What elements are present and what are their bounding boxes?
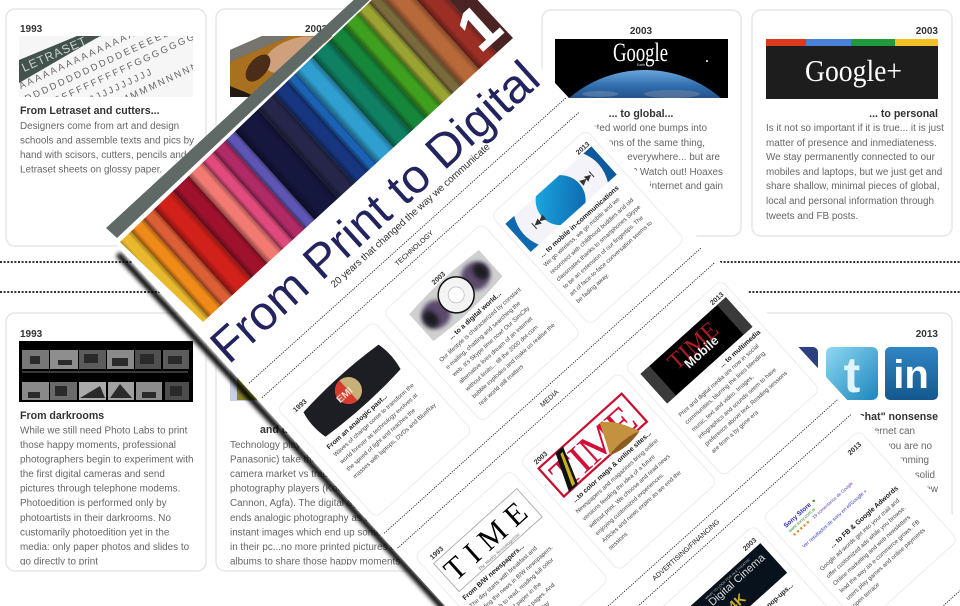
image: search result ad	[783, 468, 869, 550]
card title: ... to global...	[609, 108, 673, 120]
title: ... to a digital world...	[448, 291, 503, 341]
body text: Letraset sheets on glossy paper.	[20, 164, 162, 176]
body: are from a by gone era	[711, 409, 760, 455]
image: letraset sheet: AAAAAAAAAAAAAAAAAAAAAA	[17, 3, 192, 92]
body	[332, 381, 438, 481]
body: Online marketing and web newsletters	[832, 515, 912, 587]
body text: local and personal information through	[766, 196, 934, 207]
year label 2003 center: 2003	[630, 26, 653, 37]
card: pop-ups	[655, 525, 853, 606]
body text: Designers come from art and design	[20, 121, 179, 132]
year 2003: 2003	[533, 451, 549, 466]
body text: those happy moments, professional	[20, 440, 176, 451]
body text: photoartists in their darkrooms. No	[20, 513, 171, 524]
body	[678, 341, 796, 455]
title: From B/W newspapers...	[462, 543, 526, 602]
image: woman photo	[230, 29, 400, 97]
body: Print and digital media are now in social	[678, 343, 761, 419]
image: digital cinema ad	[678, 543, 787, 606]
body text: go directly to print	[20, 556, 98, 568]
body text: photography players (Kodak,	[230, 484, 356, 494]
panel: 2013 social media card	[752, 313, 952, 571]
body: users play games and online payments	[845, 528, 927, 602]
body text: media: only paper photos and slides to	[20, 542, 190, 553]
body: world forever as technology evolves at	[339, 393, 419, 466]
body: communities, blurring the lines blending	[684, 351, 767, 426]
body text: they true? Watch out! Hoaxes	[593, 167, 723, 178]
image: search result ad: Ver resultados de sony en el/Google »	[801, 488, 869, 550]
body	[438, 286, 564, 408]
body: infographics and sounds seem to have	[698, 367, 778, 440]
pencil banner	[120, 0, 513, 322]
section divider: dotted lines	[0, 262, 960, 292]
panel: 2003 Google Earth card	[541, 9, 742, 237]
body text: ends analogic photography as we know	[230, 513, 404, 524]
card: mobile in-communications	[491, 130, 685, 325]
body text: instant images which end up somewhere	[230, 528, 409, 538]
image: TIME Mobile: Mobile	[681, 333, 722, 371]
title: ...to color mags & online sites...	[572, 430, 653, 504]
body: offer customized ads while you browse.	[826, 505, 908, 580]
body text: We stay permanently connected to our	[766, 152, 936, 163]
body: to be an extension of our fingertips. The	[562, 215, 645, 290]
year label 1993: 1993	[20, 329, 43, 340]
title: From an analogic past...	[326, 393, 389, 451]
body text: camera market vs traditional	[230, 469, 354, 480]
body text: While we still need Photo Labs to print	[20, 426, 188, 436]
title: From Print to Digital	[201, 51, 550, 373]
body: web. It's Skype time now! Our SimCity	[451, 306, 531, 379]
section: advertising	[521, 399, 851, 606]
icon: twitter: t	[844, 347, 861, 403]
card title: and digital photography	[260, 424, 381, 436]
body: bubble explodes and make us realise the	[471, 322, 557, 400]
section: media	[384, 248, 715, 548]
body text: hand with scisors, cutters, pencils and	[20, 150, 186, 161]
image: TIME Mobile	[640, 297, 753, 404]
body: enjoying customized experiences.	[595, 472, 666, 537]
body: sessions	[608, 532, 629, 552]
body text: mobiles and laptops, but we just get and	[766, 167, 942, 178]
year 2003: 2003	[431, 271, 447, 287]
body text: solid	[915, 470, 935, 481]
year 2013: 2013	[575, 141, 591, 157]
image: TIME bw logo: TIME	[437, 489, 540, 587]
body text	[766, 123, 944, 222]
body text: Photoedition is performed only by	[20, 498, 167, 509]
body text: spread in internet and gain	[606, 181, 723, 192]
image: blue media player	[505, 146, 617, 252]
body: alternative lives dream of an internet	[458, 316, 534, 385]
card: digital world	[383, 223, 581, 422]
year 2013: 2013	[709, 291, 726, 307]
card title: From darkrooms	[20, 410, 104, 422]
image: contact sheet	[19, 341, 193, 402]
body text: many versions of the same thing,	[560, 138, 705, 149]
body text: Cannon, Agfa). The digital age	[230, 498, 364, 509]
year label 1993: 1993	[20, 24, 43, 35]
body text	[20, 121, 194, 176]
image: Google Earth: Earth	[637, 63, 645, 67]
image: search result ad: 19 comentarios de Google	[811, 480, 854, 520]
icon: twitter	[826, 347, 878, 403]
body: e-mailing, chatting and searching the	[445, 300, 523, 371]
body: music, text and video. Images,	[691, 374, 756, 433]
body: art of face-to-face conversation seems to	[569, 220, 654, 298]
image: letraset sheet: KKKKLLLLLLLMMMMNNNNNNN	[41, 52, 218, 143]
image: vinyl record: EMI	[335, 385, 355, 406]
grey top band	[106, 0, 374, 238]
section label: technology: TECHNOLOGY	[394, 230, 435, 268]
card: multimedia	[624, 280, 820, 477]
body: Newspapers and magazines bring online	[575, 438, 660, 515]
image: CD	[409, 250, 502, 341]
card: black and white newspapers	[414, 470, 609, 606]
icon: linkedin: in	[893, 353, 929, 397]
body: lead the way as e-commerce grows. FB	[839, 519, 921, 594]
image: digital camera fragment	[230, 341, 400, 401]
body	[819, 498, 934, 606]
body	[468, 537, 581, 606]
image: Google+ banner: Google+	[805, 53, 902, 88]
body text: in their pc...no more printed pictures or	[230, 542, 400, 553]
body: versions feeding the idea of a future	[582, 454, 657, 522]
body: real world still matters	[478, 364, 525, 407]
body: classmates thanks to smartphones Skype	[556, 204, 643, 283]
body text: the first digital cameras and send	[20, 469, 165, 480]
body: masses with laptops, DVDs and BlueRay	[352, 403, 438, 480]
body: preference above text. Reading sessions	[704, 371, 789, 448]
body: the speed of light and reaches the	[346, 407, 418, 473]
body text: you are no	[885, 441, 933, 452]
body: Waves of change come to transform the	[333, 382, 416, 458]
card: analogic past	[277, 321, 472, 518]
panel: 1993 letraset card	[6, 0, 222, 246]
body	[574, 438, 693, 552]
image: TIME bw logo: The Weekly Newsmagazine	[478, 532, 522, 572]
year label 2013: 2013	[916, 329, 938, 340]
section: technology	[249, 98, 579, 398]
body text: In a connected world one bumps into	[546, 123, 707, 134]
panel: 2003 photo card	[216, 9, 416, 246]
section label: media: MEDIA	[539, 389, 561, 409]
paper shadow	[118, 254, 468, 606]
body text: matter of presence and inmediateness.	[766, 138, 937, 149]
body text: share shallow, minimal pieces of global,	[766, 181, 939, 192]
body text: pictures through telephone modems.	[20, 484, 180, 494]
image: TIME Mobile: TIME	[663, 317, 724, 376]
body text: customarily photoedition yet in the	[20, 528, 170, 538]
body text: mming	[899, 455, 929, 466]
body text: albums to share those happy moments	[230, 556, 400, 568]
body text: Is it not so important if it is true... it is just	[766, 123, 944, 134]
icon: linkedin	[885, 347, 938, 400]
year 1993: 1993	[429, 546, 445, 561]
image: Google+ banner	[766, 39, 938, 99]
year label 2003: 2003	[305, 24, 328, 35]
image: blue media player: |◀◀	[530, 213, 548, 230]
year 2003: 2003	[742, 537, 758, 553]
image: blue media player: ▶▶|	[578, 170, 595, 187]
body text: Panasonic) take the digital	[230, 454, 346, 466]
body text: photographers begin to experiment with	[20, 454, 193, 466]
image: TIME color logo: TIME	[541, 397, 647, 499]
panel: 2003 digital photography card	[215, 354, 412, 572]
body text	[844, 426, 939, 495]
body: without limits... till the 2000 dot-com	[464, 325, 540, 393]
title: ... to multimedia	[718, 329, 762, 369]
section divider: finance	[671, 566, 960, 606]
image: letraset sheet: DDDDDDDDDDDDEEEEEEEEEE	[23, 13, 204, 105]
panel: 2003 Google+ card	[752, 10, 952, 236]
icon: facebook	[768, 347, 818, 400]
body: Our lifestyle is characterized by constant	[439, 287, 523, 364]
title: ... to mobile in-communications	[539, 185, 621, 259]
card title: ... to "chat" nonsense	[829, 411, 938, 423]
image: letraset sheet: EEEEFFFFFFFFFFGGGGGGGG	[29, 27, 207, 117]
body: We go wireless, we go mobile and we	[543, 196, 622, 268]
image: search result ad: ★★★★★	[791, 519, 812, 539]
body: without print. We choose and read news	[588, 454, 672, 530]
subtitle: 20 years that changed the way we communicate	[329, 141, 493, 290]
body: Google ad-words get into your mail and	[819, 498, 901, 573]
card: color mags and online sites	[520, 372, 718, 571]
image: letraset sheet: IIIIIIIIIIIIJJJJJJJJJJ	[35, 66, 155, 130]
body text: new	[920, 484, 939, 495]
body text	[20, 426, 193, 568]
year label 2003 right: 2003	[916, 26, 938, 37]
image: digital cinema ad: WHAT TO LOOK FOR IN A THEATRE	[704, 557, 752, 600]
body text: schools and assemble texts and pics by	[20, 136, 194, 146]
body text	[546, 123, 723, 192]
card: FB and Google Adwords	[762, 430, 958, 606]
image: search result ad: Sony Store	[783, 501, 813, 530]
year 1993: 1993	[292, 398, 309, 414]
body text: The internet can	[844, 426, 915, 437]
image: letraset sheet: LETRASET	[20, 33, 89, 75]
body: Articles and news expire as we end the	[601, 470, 683, 544]
body text: everywhere... but are	[627, 152, 721, 163]
card title: ... to personal	[869, 108, 938, 120]
card title: From Letraset and cutters...	[20, 105, 160, 117]
title: ... to FB & Google Adwords	[829, 485, 900, 550]
body: be fading away.	[576, 272, 611, 305]
image: Google Earth	[555, 39, 728, 98]
image: Google Earth: Google	[613, 38, 668, 67]
image: letraset sheet	[19, 36, 193, 97]
body text: tweets and FB posts.	[766, 211, 858, 222]
image: search result ad: www.sony.com.ar	[787, 506, 817, 533]
body text: Technology players (Sony,	[230, 440, 345, 451]
panel: 1993 darkrooms card	[6, 313, 206, 571]
image: search result ad: ●	[811, 498, 818, 505]
body: reconnect with childhood buddies and old	[549, 198, 635, 276]
image: vinyl record	[300, 341, 404, 440]
body text	[230, 440, 409, 568]
section label: advertising: ADVERTISING/FINANCING	[651, 519, 721, 582]
year 2013: 2013	[847, 441, 863, 457]
body	[543, 189, 662, 305]
